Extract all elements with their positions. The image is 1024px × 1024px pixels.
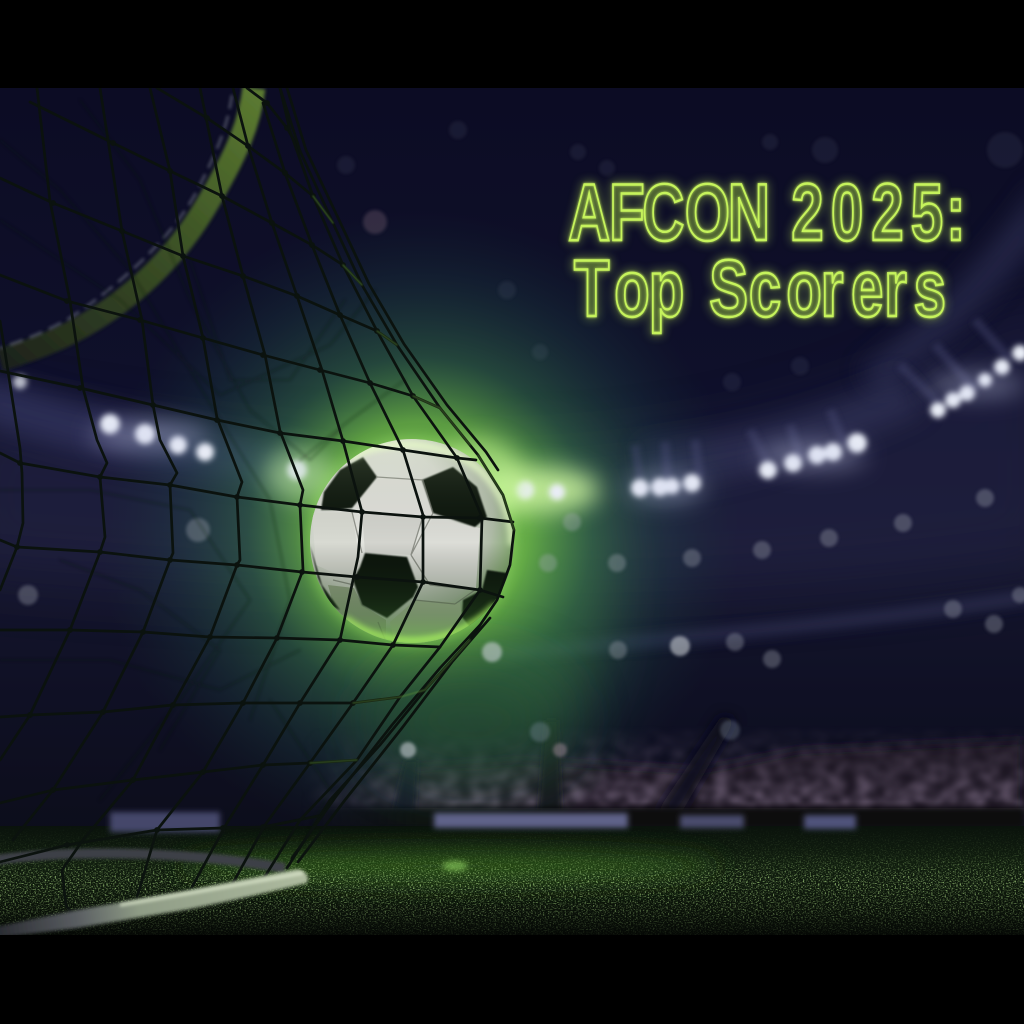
pitch grass <box>0 825 1024 935</box>
far goal line <box>0 853 285 868</box>
goal frame arc <box>0 88 254 360</box>
title: AFCON 2025: Top Scorers <box>568 167 965 333</box>
distant net layer <box>106 236 404 686</box>
title line 1: AFCON 2025: <box>568 167 965 257</box>
stand haze <box>0 180 1024 655</box>
football <box>300 435 525 650</box>
ball seams <box>333 477 476 642</box>
title line 2: Top Scorers <box>574 243 946 333</box>
net green highlights <box>310 196 514 763</box>
blurred crowd <box>320 734 1024 826</box>
green light beam <box>148 251 691 818</box>
net rows <box>0 88 513 862</box>
ball panels <box>312 508 480 643</box>
net columns <box>0 88 514 925</box>
goal line post <box>0 869 308 938</box>
stadium floodlights <box>13 320 1024 502</box>
bokeh lights <box>18 121 1024 758</box>
goal net <box>0 88 514 925</box>
ball dark pentagons <box>310 457 507 627</box>
sponsor boards <box>110 812 856 832</box>
